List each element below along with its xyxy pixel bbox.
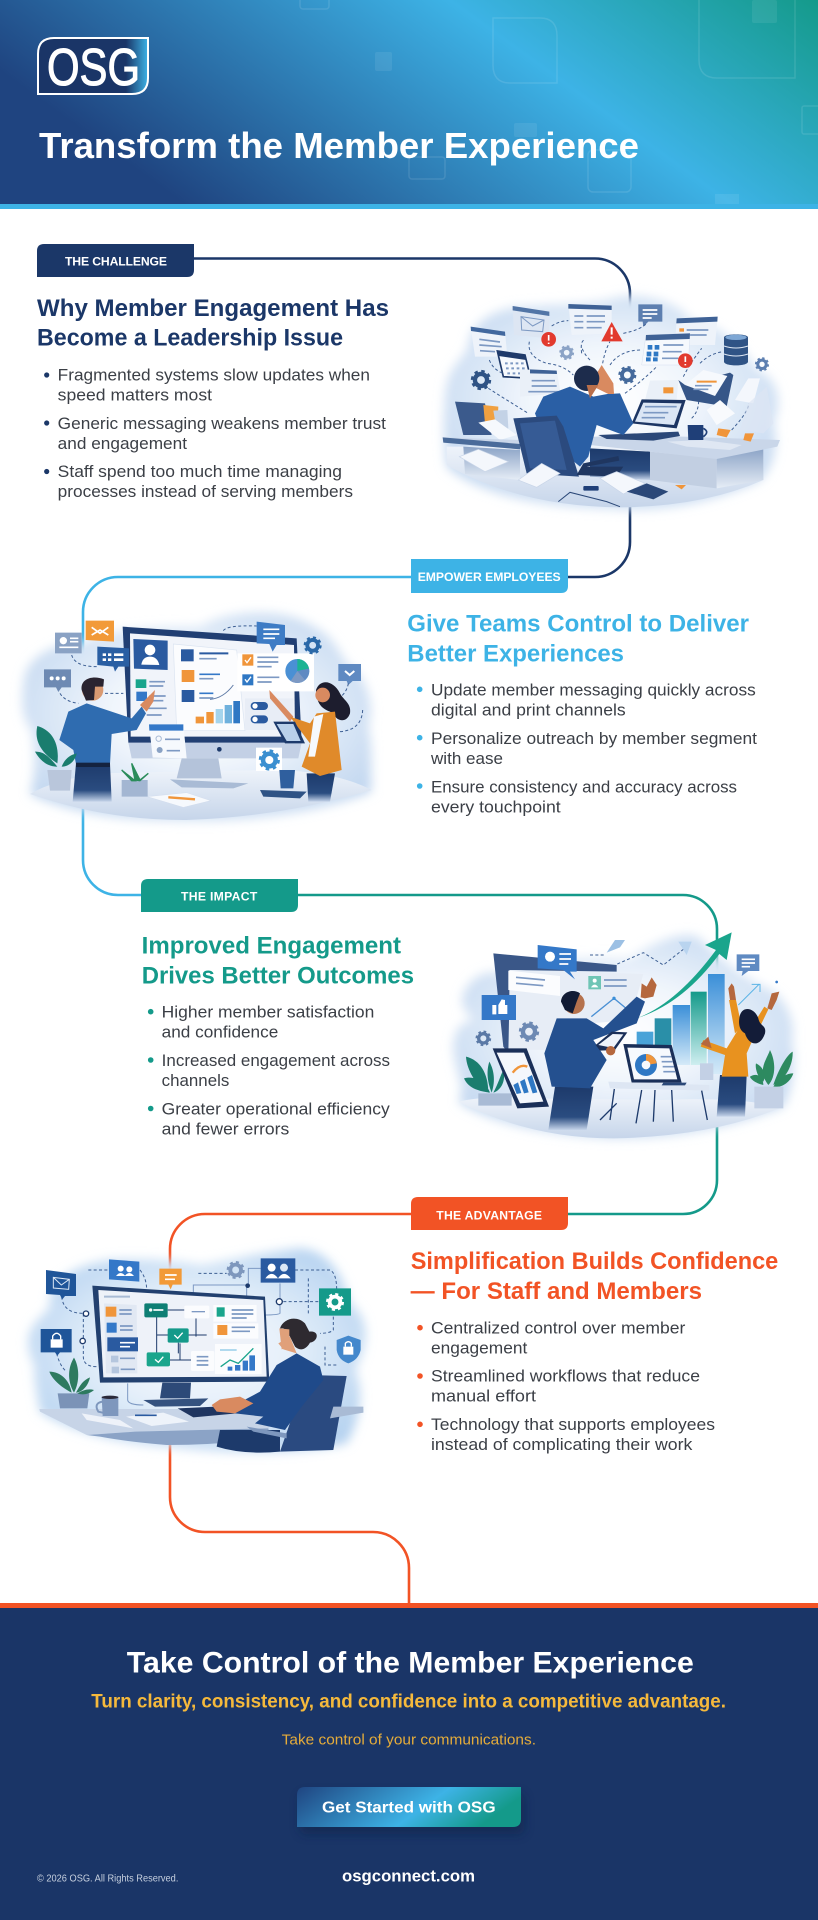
- heading: challenge: Why Member Engagement Has: [37, 295, 389, 322]
- tag: the challenge: THE CHALLENGE: [65, 254, 167, 268]
- desk: [463, 447, 520, 480]
- floor papers: [459, 449, 645, 494]
- bullet list: impact: and confidence: [162, 1024, 278, 1042]
- windows: [471, 327, 507, 357]
- orange chip: [159, 1269, 182, 1289]
- heading: empower: Better Experiences: [407, 641, 624, 668]
- heading: advantage: — For Staff and Members: [411, 1278, 702, 1305]
- bullet list: impact: channels: [162, 1072, 229, 1090]
- monitor: [128, 743, 302, 758]
- bullet list: challenge: Generic messaging weakens member trust: [58, 415, 386, 433]
- plant right: [750, 1050, 793, 1087]
- panel: the impact: [141, 879, 794, 1138]
- floating cards: [57, 1270, 337, 1372]
- laptop on table: [623, 1044, 682, 1083]
- bullet list: impact: Increased engagement across: [162, 1052, 390, 1070]
- laptop: [632, 399, 686, 428]
- tablet: [493, 1048, 549, 1108]
- header banner: [0, 0, 818, 209]
- tag: the advantage: [411, 1197, 568, 1230]
- mug, notes: [688, 425, 703, 440]
- tag: the impact: [141, 879, 298, 912]
- bullet list: empower: every touchpoint: [431, 798, 561, 816]
- bullet list: advantage: Streamlined workflows that reduce: [431, 1368, 700, 1386]
- man: [548, 1087, 593, 1130]
- tag: empower employees: EMPOWER EMPLOYEES: [418, 570, 561, 584]
- heading: challenge: [37, 295, 389, 352]
- connector: orange: [170, 1214, 412, 1606]
- bullet list: empower: Ensure consistency and accuracy across: [431, 778, 737, 796]
- bullet list: empower: Personalize outreach by member segment: [431, 730, 757, 748]
- connector lines: [83, 258, 717, 1606]
- woman & chair: [217, 1430, 280, 1453]
- desk objects: [147, 793, 211, 807]
- bullet list: challenge: processes instead of serving members: [58, 483, 353, 501]
- bullet list: impact: [148, 1004, 390, 1138]
- right desk items: [645, 380, 678, 400]
- heading: advantage: [411, 1248, 778, 1305]
- heading: advantage: Simplification Builds Confidence: [411, 1248, 778, 1275]
- bullet list: advantage: engagement: [431, 1339, 528, 1357]
- illustration: team at dashboard monitor: [22, 613, 372, 821]
- calendar: [497, 351, 531, 378]
- plant: [35, 726, 77, 767]
- heading: empower: Give Teams Control to Deliver: [407, 611, 749, 638]
- copyright: © 2026 OSG. All Rights Reserved.: [37, 1874, 178, 1885]
- right panel + pie: [237, 653, 314, 691]
- bullet list: impact: Greater operational efficiency: [162, 1100, 390, 1118]
- gears: [472, 371, 490, 389]
- bullet list: advantage: manual effort: [431, 1388, 536, 1406]
- bullet list: advantage: [417, 1319, 715, 1454]
- bullet list: advantage: Centralized control over member: [431, 1319, 686, 1337]
- heading: empower: [407, 611, 749, 668]
- OSG logo: OSG: [47, 39, 140, 97]
- tag: empower employees: [411, 559, 568, 593]
- bullet list: advantage: Technology that supports employees: [431, 1416, 715, 1434]
- woman: [307, 773, 335, 802]
- right cards: [213, 1305, 257, 1322]
- bullet list: challenge: [44, 367, 386, 501]
- illustration: overwhelmed worker at desk: [443, 296, 780, 509]
- bullet list: challenge: Fragmented systems slow updates when: [58, 367, 370, 385]
- heading: impact: [142, 932, 414, 989]
- dashed links: [488, 321, 748, 430]
- heading: impact: Drives Better Outcomes: [142, 962, 414, 989]
- man: [73, 763, 112, 802]
- bullet list: empower: digital and print channels: [431, 702, 626, 720]
- plant + mug: [58, 1393, 89, 1408]
- website: osgconnect.com: [342, 1867, 475, 1886]
- floating cards: [55, 633, 82, 653]
- worker: [535, 387, 633, 467]
- bullet list: empower: [417, 682, 757, 816]
- bullet list: empower: with ease: [430, 750, 503, 768]
- bullet list: impact: and fewer errors: [162, 1120, 289, 1138]
- woman: [717, 1075, 747, 1117]
- bullet list: advantage: instead of complicating their work: [431, 1436, 693, 1454]
- heading: impact: Improved Engagement: [142, 932, 401, 959]
- small card: [149, 724, 187, 758]
- tag: the challenge: [37, 244, 194, 277]
- bullet list: empower: Update member messaging quickly across: [431, 682, 756, 700]
- tag: the advantage: THE ADVANTAGE: [436, 1208, 542, 1222]
- footer panel: [0, 1603, 818, 1920]
- connector: light blue: [83, 577, 412, 895]
- tag: the impact: THE IMPACT: [181, 890, 258, 904]
- monitor: [160, 1383, 191, 1398]
- profile card: [133, 639, 168, 670]
- panel: empower employees: [22, 559, 757, 821]
- back monitor: [493, 953, 617, 1053]
- bars: [637, 1032, 653, 1045]
- main title: Transform the Member Experience: [39, 125, 639, 166]
- flow nodes: [157, 1310, 207, 1360]
- growth arrow: [637, 932, 732, 1018]
- bullet list: challenge: Staff spend too much time managing: [58, 463, 342, 481]
- desk: [39, 1409, 363, 1435]
- bullet list: challenge: and engagement: [58, 435, 187, 453]
- call to action button: [297, 1787, 524, 1834]
- alerts: [541, 332, 556, 347]
- heading: challenge: Become a Leadership Issue: [37, 325, 343, 352]
- plant left: [464, 1057, 504, 1093]
- bullet list: challenge: speed matters most: [58, 387, 212, 405]
- left folder and paper: [455, 402, 492, 435]
- bullet list: impact: Higher member satisfaction: [162, 1004, 374, 1022]
- centre panel: [173, 644, 245, 731]
- chat & sparkle: [737, 954, 759, 976]
- illustration: woman at workflow monitor: [28, 1248, 365, 1453]
- call to action button: Get Started with OSG: [322, 1800, 496, 1817]
- connector: navy: [194, 258, 630, 577]
- panel: the advantage: [28, 1197, 778, 1454]
- panel: the challenge: [37, 244, 780, 509]
- database: [724, 334, 748, 365]
- illustration: growth chart celebration: [453, 932, 794, 1138]
- footer heading: Take Control of the Member Experience: [127, 1647, 694, 1680]
- connector: teal: [296, 895, 717, 1214]
- footer tagline: Turn clarity, consistency, and confidence into a competitive advantage.: [91, 1691, 726, 1712]
- footer subtext: Take control of your communications.: [282, 1732, 536, 1748]
